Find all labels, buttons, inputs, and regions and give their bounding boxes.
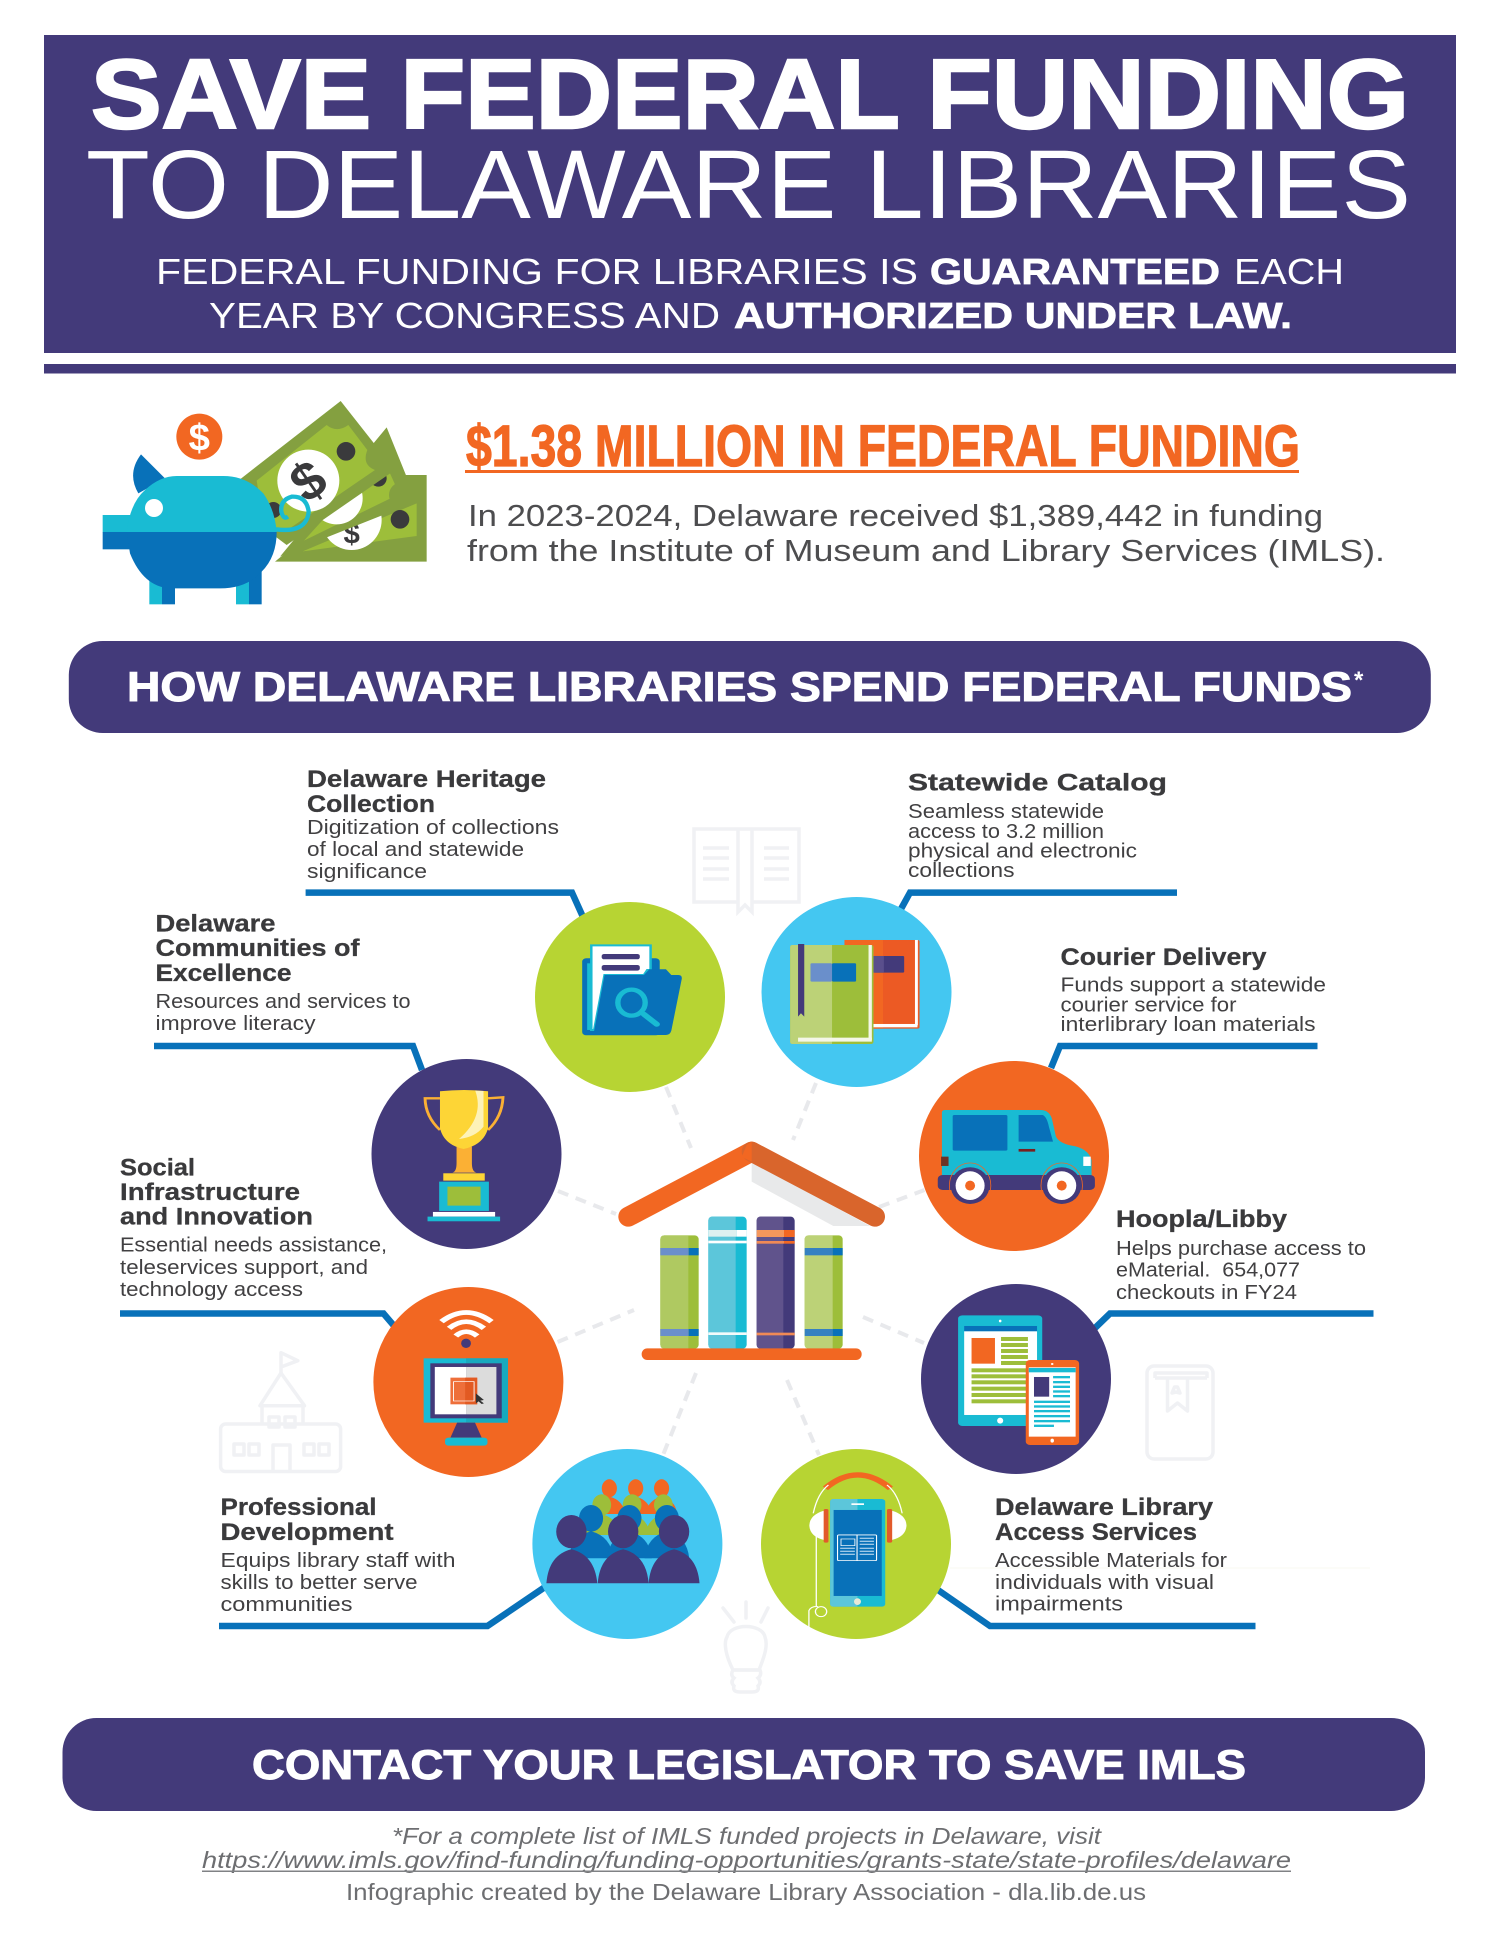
funding description: from the Institute of Museum and Library Services (IMLS). xyxy=(467,533,1385,568)
ghost icon: bookmarked book xyxy=(1147,1366,1213,1459)
icon: tablet and phone circle xyxy=(921,1284,1111,1474)
call to action pill xyxy=(62,1718,1425,1811)
icon: piggy bank with money xyxy=(103,401,427,604)
panel: Delaware Library Access Services xyxy=(995,1494,1227,1616)
funding headline: $1.38 MILLION IN FEDERAL FUNDING xyxy=(466,414,1300,479)
book 3 xyxy=(757,1217,795,1349)
description xyxy=(995,1550,1227,1616)
call to action pill: CONTACT YOUR LEGISLATOR TO SAVE IMLS xyxy=(252,1741,1246,1788)
header banner xyxy=(44,35,1456,374)
description: Seamless statewide xyxy=(908,801,1104,823)
description xyxy=(1060,975,1326,1036)
description xyxy=(156,991,410,1035)
heading: Statewide Catalog xyxy=(908,770,1167,797)
description: of local and statewide xyxy=(307,839,524,861)
description: Essential needs assistance, xyxy=(120,1235,387,1257)
description: access to 3.2 million xyxy=(908,821,1104,843)
center icon: library house and books xyxy=(628,1142,875,1360)
heading: Development xyxy=(220,1519,394,1546)
description: collections xyxy=(908,860,1014,882)
heading: Delaware Library xyxy=(995,1494,1214,1521)
subtitle: AUTHORIZED UNDER LAW. xyxy=(734,295,1292,336)
book 4 xyxy=(805,1235,843,1349)
heading xyxy=(120,1155,313,1231)
subtitle: EACH xyxy=(1234,251,1344,292)
heading xyxy=(156,911,361,987)
roof xyxy=(628,1152,752,1217)
description: improve literacy xyxy=(156,1013,316,1035)
ghost icon: school building xyxy=(221,1353,341,1472)
shelf xyxy=(642,1348,862,1360)
description: Equips library staff with xyxy=(220,1550,456,1572)
description: eMaterial. 654,077 xyxy=(1116,1260,1300,1282)
heading xyxy=(220,1494,394,1546)
funding description: In 2023-2024, Delaware received $1,389,442 in funding xyxy=(468,498,1323,533)
heading: Collection xyxy=(307,791,435,818)
heading xyxy=(995,1494,1214,1546)
panel: Delaware Communities of Excellence xyxy=(156,911,410,1035)
section heading pill xyxy=(69,641,1431,733)
subtitle: FEDERAL FUNDING FOR LIBRARIES IS xyxy=(156,251,918,292)
description: Funds support a statewide xyxy=(1060,975,1326,997)
footnote: Infographic created by the Delaware Library Association - dla.lib.de.us xyxy=(346,1879,1146,1905)
ghost icon: light bulb xyxy=(723,1602,768,1692)
icon: delivery van circle xyxy=(919,1061,1109,1251)
description xyxy=(908,801,1137,882)
footnote: *For a complete list of IMLS funded projects in Delaware, visit xyxy=(392,1823,1103,1849)
icon: flat dollar bill: $ xyxy=(344,517,360,550)
dashed connectors xyxy=(558,1083,924,1455)
description: Digitization of collections xyxy=(307,817,559,839)
title line 2: TO DELAWARE LIBRARIES xyxy=(86,130,1411,239)
section heading pill: HOW DELAWARE LIBRARIES SPEND FEDERAL FUNDS xyxy=(127,663,1352,710)
icon: phone with headphones circle xyxy=(761,1449,951,1639)
title line 1: SAVE FEDERAL FUNDING xyxy=(91,39,1409,149)
icon: coin xyxy=(176,414,222,460)
panel: Courier Delivery xyxy=(1060,944,1326,1036)
icon: pig xyxy=(103,454,309,604)
icon: coin: $ xyxy=(189,416,210,459)
heading: Social xyxy=(120,1155,195,1182)
description: Helps purchase access to xyxy=(1116,1238,1366,1260)
subtitle: GUARANTEED xyxy=(930,251,1220,292)
heading: Excellence xyxy=(156,960,292,987)
description: individuals with visual xyxy=(995,1572,1214,1594)
footnote xyxy=(202,1823,1291,1905)
icon: folder circle xyxy=(535,902,725,1092)
book 1 xyxy=(660,1235,699,1349)
heading: Access Services xyxy=(995,1519,1197,1546)
leader lines xyxy=(120,893,1374,1626)
heading xyxy=(307,766,546,818)
footnote: https://www.imls.gov/find-funding/funding-opportunities/grants-state/state-profiles/delaware xyxy=(202,1847,1291,1873)
heading: Delaware xyxy=(156,911,276,938)
heading: and Innovation xyxy=(120,1204,313,1231)
funding description xyxy=(467,498,1385,568)
description: Resources and services to xyxy=(156,991,410,1013)
description: technology access xyxy=(120,1279,303,1301)
description: interlibrary loan materials xyxy=(1060,1014,1316,1036)
description: physical and electronic xyxy=(908,841,1137,863)
description xyxy=(120,1235,387,1301)
roof shadow xyxy=(752,1162,870,1226)
icon: monitor with wifi circle xyxy=(373,1287,563,1477)
heading: Hoopla/Libby xyxy=(1116,1206,1288,1233)
panel: Social Infrastructure and Innovation xyxy=(120,1155,387,1301)
section heading pill: * xyxy=(1354,667,1364,694)
heading: Professional xyxy=(220,1494,376,1521)
description: Accessible Materials for xyxy=(995,1550,1227,1572)
subtitle: YEAR BY CONGRESS AND xyxy=(209,295,720,336)
panel: Hoopla/Libby xyxy=(1116,1206,1366,1304)
subtitle xyxy=(156,251,1344,336)
description: communities xyxy=(220,1594,352,1616)
ghost icon: open book xyxy=(694,829,799,912)
icon: catalog books circle xyxy=(762,897,952,1087)
book 2 xyxy=(708,1217,747,1349)
icon: middle dollar bill xyxy=(280,427,417,557)
heading: Courier Delivery xyxy=(1060,944,1267,971)
description xyxy=(1116,1238,1366,1304)
description: courier service for xyxy=(1060,995,1237,1017)
description: checkouts in FY24 xyxy=(1116,1282,1297,1304)
description: skills to better serve xyxy=(220,1572,418,1594)
description xyxy=(220,1550,456,1616)
icon: trophy circle xyxy=(372,1059,562,1249)
description: impairments xyxy=(995,1594,1123,1616)
panel: Delaware Heritage Collection xyxy=(307,766,559,883)
heading: Communities of xyxy=(156,935,361,962)
description: significance xyxy=(307,861,427,883)
icon: audience circle xyxy=(532,1449,722,1639)
panel: Professional Development xyxy=(220,1494,456,1616)
heading: Delaware Heritage xyxy=(307,766,546,793)
description: teleservices support, and xyxy=(120,1257,368,1279)
panel: Statewide Catalog xyxy=(908,770,1167,882)
description xyxy=(307,817,559,883)
icon: front dollar bill: $ xyxy=(280,449,338,514)
icon: front dollar bill xyxy=(240,401,395,545)
heading: Infrastructure xyxy=(120,1179,300,1206)
icon: flat dollar bill xyxy=(275,475,427,562)
